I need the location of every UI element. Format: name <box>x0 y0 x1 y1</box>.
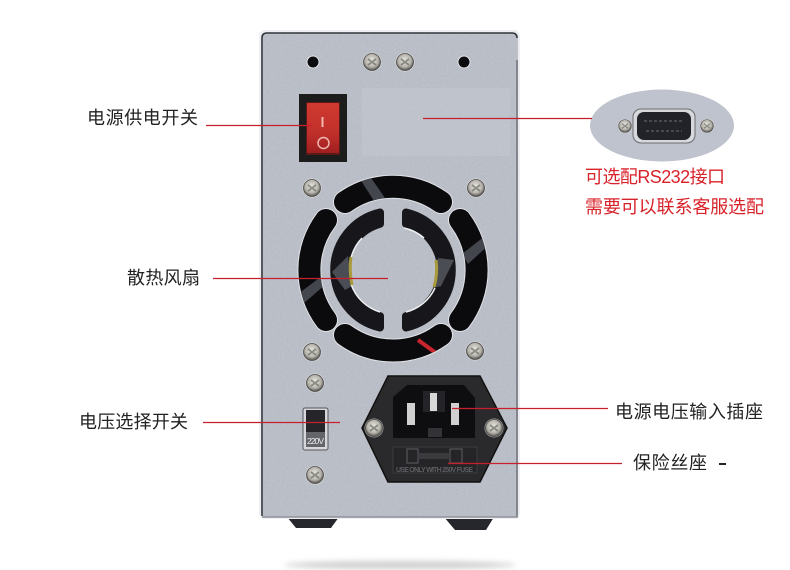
callout: optional RS232: 可选配RS232接口 <box>585 167 725 187</box>
fuse holder <box>393 447 477 474</box>
leader line: fan <box>213 278 388 280</box>
cooling fan grille <box>298 172 492 353</box>
label: voltage selector: 电压选择开关 <box>79 412 188 432</box>
left foot <box>287 517 339 528</box>
leader line: power switch <box>206 124 313 126</box>
label: cooling fan: 散热风扇 <box>127 268 200 288</box>
leader line: fuse <box>448 462 622 464</box>
dash mark <box>719 463 726 465</box>
fan screw top left <box>302 178 322 198</box>
power rocker switch <box>299 94 347 162</box>
mounting hole right <box>458 56 470 68</box>
label: power inlet: 电源电压输入插座 <box>615 402 763 422</box>
C14 inlet socket <box>393 385 475 438</box>
power inlet and fuse block <box>362 376 507 482</box>
label: fuse holder: 保险丝座 <box>633 453 707 473</box>
right foot <box>444 517 494 530</box>
RS232 connector inset <box>590 90 734 162</box>
outer slots <box>298 172 492 353</box>
callout: contact support: 需要可以联系客服选配 <box>585 197 764 217</box>
inlet screw right <box>484 418 504 438</box>
leader line: voltage selector <box>203 422 340 424</box>
inlet screw left <box>364 418 384 438</box>
top screw 1 <box>362 52 382 72</box>
fan screw bottom right <box>466 342 484 360</box>
mounting hole left <box>307 56 319 68</box>
label: power switch: 电源供电开关 <box>87 108 198 128</box>
fan screw bottom left <box>302 342 322 362</box>
fuse holder: USE ONLY WITH 250V FUSE <box>396 467 473 474</box>
voltage selector switch <box>303 408 328 450</box>
top screw 2 <box>396 52 414 72</box>
selector screw bottom <box>306 466 324 484</box>
inner ring halves <box>332 212 454 328</box>
leader line: power inlet <box>452 408 608 410</box>
fan screw top right <box>466 178 486 198</box>
leader line: RS232 <box>423 118 592 120</box>
voltage selector switch: 220V <box>307 436 324 446</box>
selector screw top <box>306 374 324 392</box>
device rear panel <box>259 30 520 519</box>
floor shadow <box>284 561 516 569</box>
